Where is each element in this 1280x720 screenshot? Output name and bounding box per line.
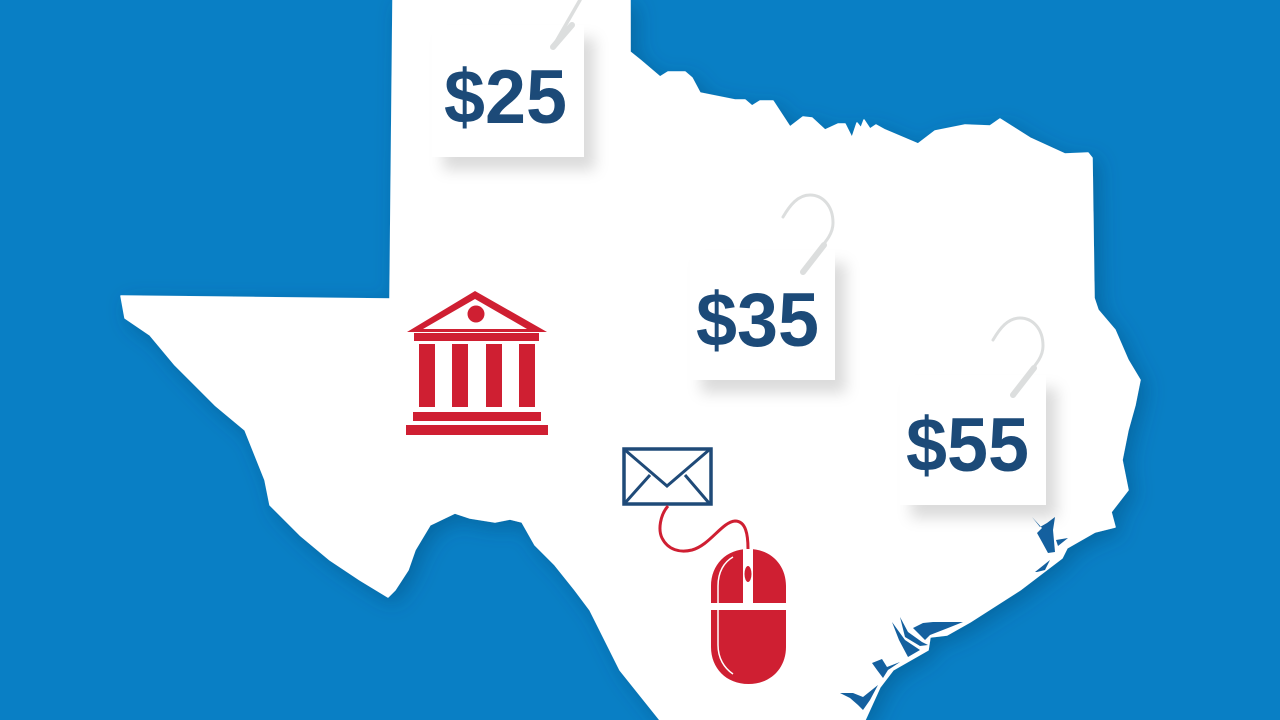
- price: $25: [444, 55, 567, 140]
- map: Texas: [121, 0, 1140, 720]
- mouse cable: [660, 506, 748, 551]
- price tag: $35: [690, 195, 835, 380]
- hook: [553, 0, 580, 47]
- coastal bays: [840, 517, 1068, 710]
- hook: [783, 195, 833, 272]
- price: $35: [696, 278, 819, 363]
- price: $55: [906, 403, 1029, 488]
- hook: [993, 318, 1043, 395]
- icon: bank building: [406, 291, 548, 435]
- icon: envelope: [624, 449, 711, 504]
- price tag: $25: [432, 0, 584, 157]
- icon: computer mouse: [711, 549, 786, 684]
- price tag: $55: [900, 318, 1046, 505]
